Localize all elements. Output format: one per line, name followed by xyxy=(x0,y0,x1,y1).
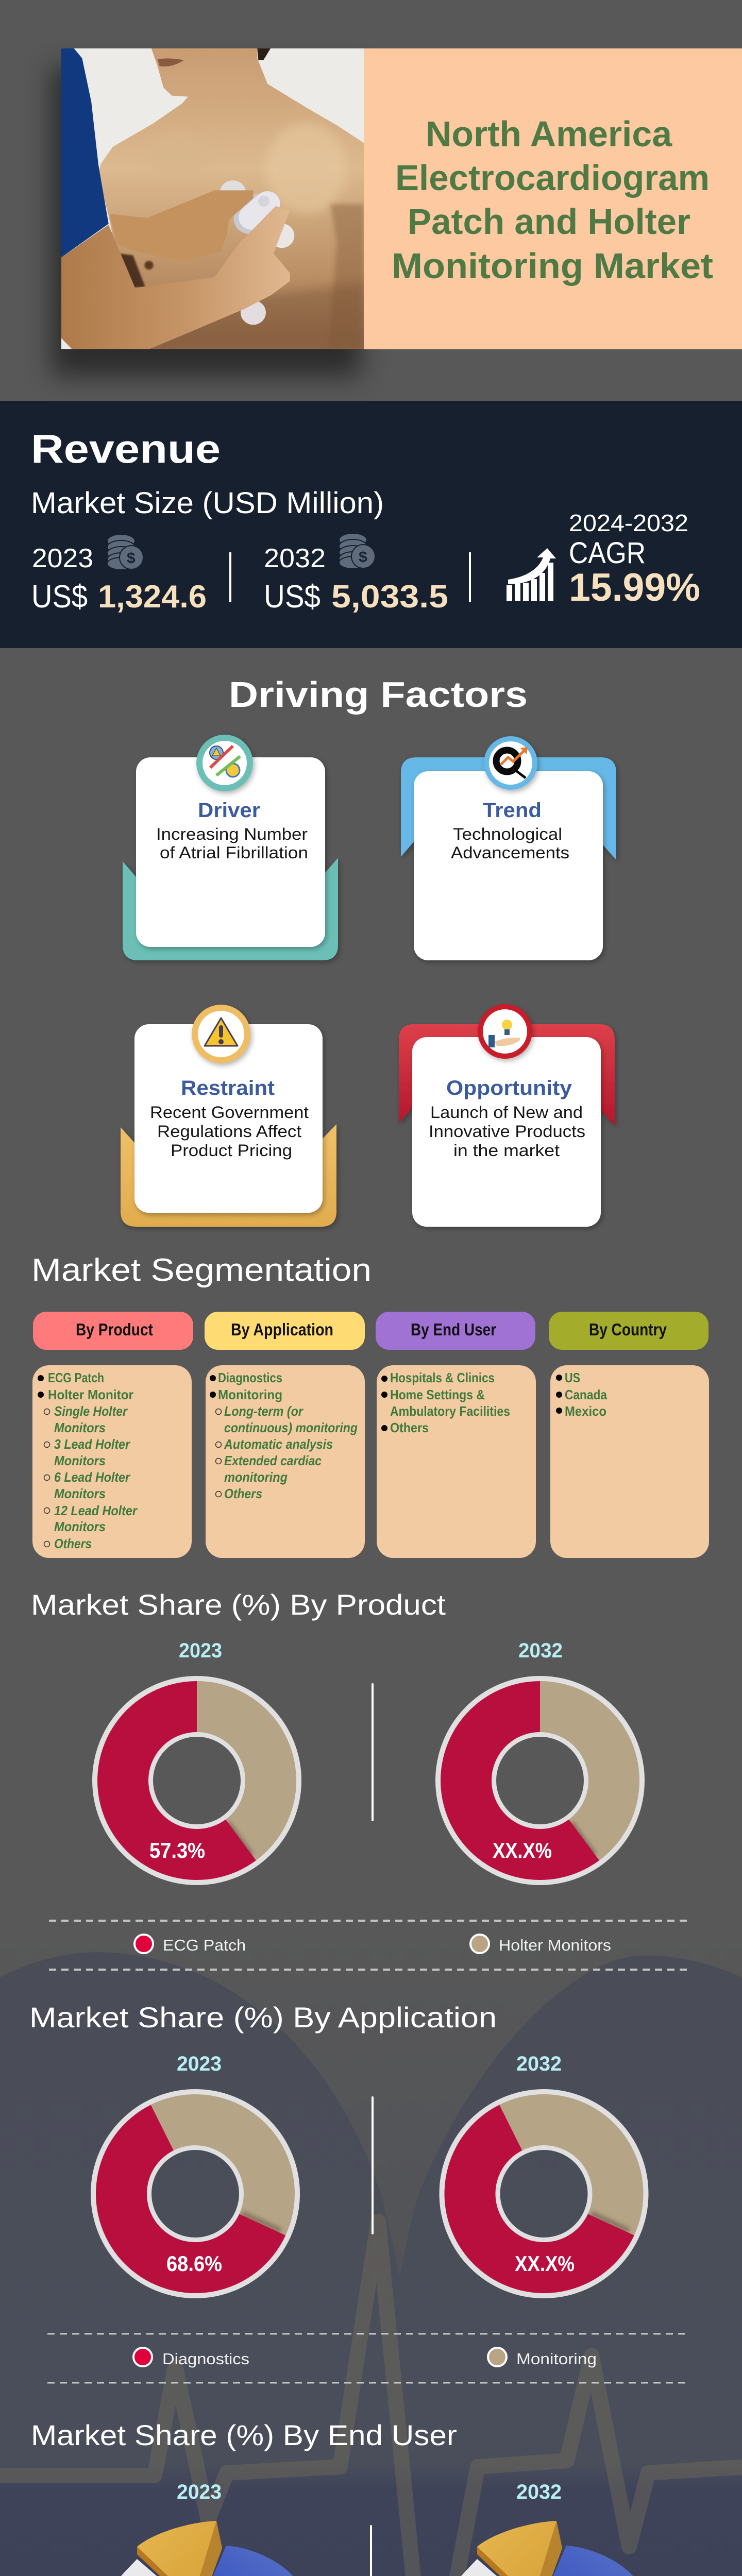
heading: market share by end user: Market Share (%) By End User xyxy=(31,2419,457,2451)
legend: product: Holter Monitors xyxy=(499,1936,611,1954)
divider xyxy=(229,552,231,602)
text: trend description: Advancements xyxy=(451,843,569,862)
segment list: country xyxy=(550,1365,709,1558)
header: photo and title panel xyxy=(52,48,742,376)
segment list: application: monitoring xyxy=(224,1469,288,1485)
value: 68.6%: 68.6% xyxy=(166,2251,222,2276)
text: opportunity description: Innovative Products xyxy=(429,1122,585,1141)
heading: market segmentation: Market Segmentation xyxy=(31,1252,372,1288)
segment list: end user: Home Settings & xyxy=(390,1387,485,1402)
label: 2032: 2032 xyxy=(516,2481,562,2503)
segment list: product: Holter Monitor xyxy=(48,1387,133,1402)
icon: coins 2023: $ xyxy=(127,550,136,567)
legend: application xyxy=(133,2348,597,2368)
segment list: product: Monitors xyxy=(54,1453,106,1468)
segment list: application: Long-term (or xyxy=(224,1403,304,1419)
icon: coins 2023 xyxy=(107,534,143,570)
page background xyxy=(0,1952,742,2576)
metric: CAGR: CAGR xyxy=(569,536,646,570)
segment list: country: Mexico xyxy=(565,1403,606,1419)
segment list: product xyxy=(32,1365,192,1558)
heading: market share by application: Market Share (%) By Application xyxy=(29,2001,497,2033)
metric: 2032 value xyxy=(264,544,448,615)
segment list: application xyxy=(206,1365,365,1558)
divider xyxy=(370,2525,372,2576)
metric: 2032 value: 2032 xyxy=(264,544,326,573)
pie chart: end user 2032 xyxy=(432,2521,649,2576)
label: 2032: 2032 xyxy=(518,1639,563,1662)
segment list: country: US xyxy=(565,1370,580,1385)
metric: 2032 value: 5,033.5 xyxy=(331,579,448,615)
title panel: Monitoring Market xyxy=(392,246,713,286)
text: restraint description: Recent Government xyxy=(150,1103,309,1122)
segment list: product: Monitors xyxy=(54,1519,106,1534)
segment list: end user: Others xyxy=(390,1420,429,1435)
text: driver description: of Atrial Fibrillation xyxy=(160,843,308,862)
text: opportunity description xyxy=(429,1103,585,1160)
divider xyxy=(372,1683,374,1821)
value: placeholder: XX.X% xyxy=(493,1838,552,1862)
metric: CAGR xyxy=(569,510,700,609)
donut chart: application 2023 xyxy=(96,2094,295,2293)
segment list: product: 6 Lead Holter xyxy=(54,1469,131,1485)
segment list: product: 3 Lead Holter xyxy=(54,1436,131,1452)
metric: CAGR: 15.99% xyxy=(569,566,700,609)
segment list: product: Single Holter xyxy=(54,1403,128,1419)
label: 2032: 2032 xyxy=(516,2053,562,2075)
segment header: by application xyxy=(205,1312,365,1350)
heading: revenue: Revenue xyxy=(31,426,221,471)
segment list: end user xyxy=(377,1365,536,1558)
value: placeholder: XX.X% xyxy=(515,2251,575,2276)
donut chart: product 2032 xyxy=(441,1681,639,1880)
heading: market share by product: Market Share (%) By Product xyxy=(31,1588,446,1621)
panel: restraint xyxy=(121,1005,336,1227)
divider xyxy=(469,552,471,602)
segment list: application: Monitoring xyxy=(218,1387,282,1402)
metric: 2032 value: US$ xyxy=(264,579,321,615)
text: driver heading: Driver xyxy=(198,799,260,822)
title panel: North America xyxy=(426,114,672,154)
icon: growth chart xyxy=(507,548,556,601)
segment list: application: Diagnostics xyxy=(218,1370,282,1385)
icon: restraint xyxy=(192,1005,250,1063)
text: restraint description: Regulations Affect xyxy=(157,1122,301,1141)
donut chart: application 2032 xyxy=(444,2094,643,2293)
segment list: application: Automatic analysis xyxy=(224,1436,333,1452)
panel: opportunity xyxy=(399,1004,615,1227)
segment header: by country xyxy=(549,1312,709,1350)
value: 57.3%: 57.3% xyxy=(149,1838,205,1862)
text: market size: Market Size (USD Million) xyxy=(31,486,384,520)
metric: CAGR: 2024-2032 xyxy=(569,510,688,536)
donut chart: product 2023 xyxy=(97,1681,296,1880)
legend: application: Diagnostics xyxy=(162,2350,249,2368)
segment list: end user: Hospitals & Clinics xyxy=(390,1370,495,1385)
text: restraint heading: Restraint xyxy=(181,1077,275,1099)
segment header: by end user: By End User xyxy=(411,1320,496,1339)
panel: revenue xyxy=(0,401,742,648)
text: opportunity description: Launch of New and xyxy=(430,1103,583,1122)
segment list: application: Extended cardiac xyxy=(224,1453,322,1468)
text: driver description xyxy=(156,825,308,862)
metric: 2023 value: 1,324.6 xyxy=(98,579,207,615)
panel: driver xyxy=(123,735,338,960)
segment header: by end user xyxy=(376,1312,535,1350)
text: opportunity heading: Opportunity xyxy=(446,1077,572,1099)
text: restraint description xyxy=(150,1103,309,1160)
segment list: country: Canada xyxy=(565,1387,607,1402)
segment header: by product xyxy=(33,1312,193,1350)
segment list: product: Others xyxy=(54,1536,92,1551)
segment list: application: continuous) monitoring xyxy=(224,1420,358,1435)
icon: trend xyxy=(484,736,537,790)
text: trend description: Technological xyxy=(453,825,562,843)
divider xyxy=(372,2096,374,2234)
icon: opportunity xyxy=(478,1004,532,1059)
segment header: by country: By Country xyxy=(589,1320,667,1339)
pie chart: end user 2023 xyxy=(92,2521,309,2576)
text: trend heading: Trend xyxy=(483,799,542,822)
metric: 2023 value xyxy=(31,544,207,615)
legend: product xyxy=(134,1935,611,1954)
label: 2023: 2023 xyxy=(179,1639,222,1662)
segment list: product: 12 Lead Holter xyxy=(54,1503,138,1518)
title panel: Patch and Holter xyxy=(408,201,690,242)
segment list: product: ECG Patch xyxy=(48,1370,104,1385)
heading: driving factors: Driving Factors xyxy=(229,674,528,715)
segment list: product: Monitors xyxy=(54,1486,106,1501)
icon: coins 2032 xyxy=(339,533,375,569)
legend: application: Monitoring xyxy=(516,2350,597,2368)
text: driver description: Increasing Number xyxy=(156,825,308,843)
segment header: by application: By Application xyxy=(231,1320,333,1339)
panel: trend xyxy=(401,736,616,960)
icon: driver xyxy=(196,735,253,791)
title panel xyxy=(364,48,742,349)
text: restraint description: Product Pricing xyxy=(171,1141,292,1160)
segment header: by product: By Product xyxy=(76,1320,153,1339)
title panel: Electrocardiogram xyxy=(395,158,710,198)
icon: coins 2032: $ xyxy=(359,549,367,566)
legend: product: ECG Patch xyxy=(163,1936,246,1954)
text: trend description xyxy=(451,825,569,862)
metric: 2023 value: US$ xyxy=(31,579,88,615)
segment list: end user: Ambulatory Facilities xyxy=(390,1403,510,1419)
label: 2023: 2023 xyxy=(177,2481,222,2503)
text: opportunity description: in the market xyxy=(453,1141,560,1160)
label: 2023: 2023 xyxy=(177,2053,222,2075)
segment list: product: Monitors xyxy=(54,1420,106,1435)
segment list: application: Others xyxy=(224,1486,262,1501)
photo: patch placed on chest xyxy=(61,48,364,349)
metric: 2023 value: 2023 xyxy=(32,544,93,573)
